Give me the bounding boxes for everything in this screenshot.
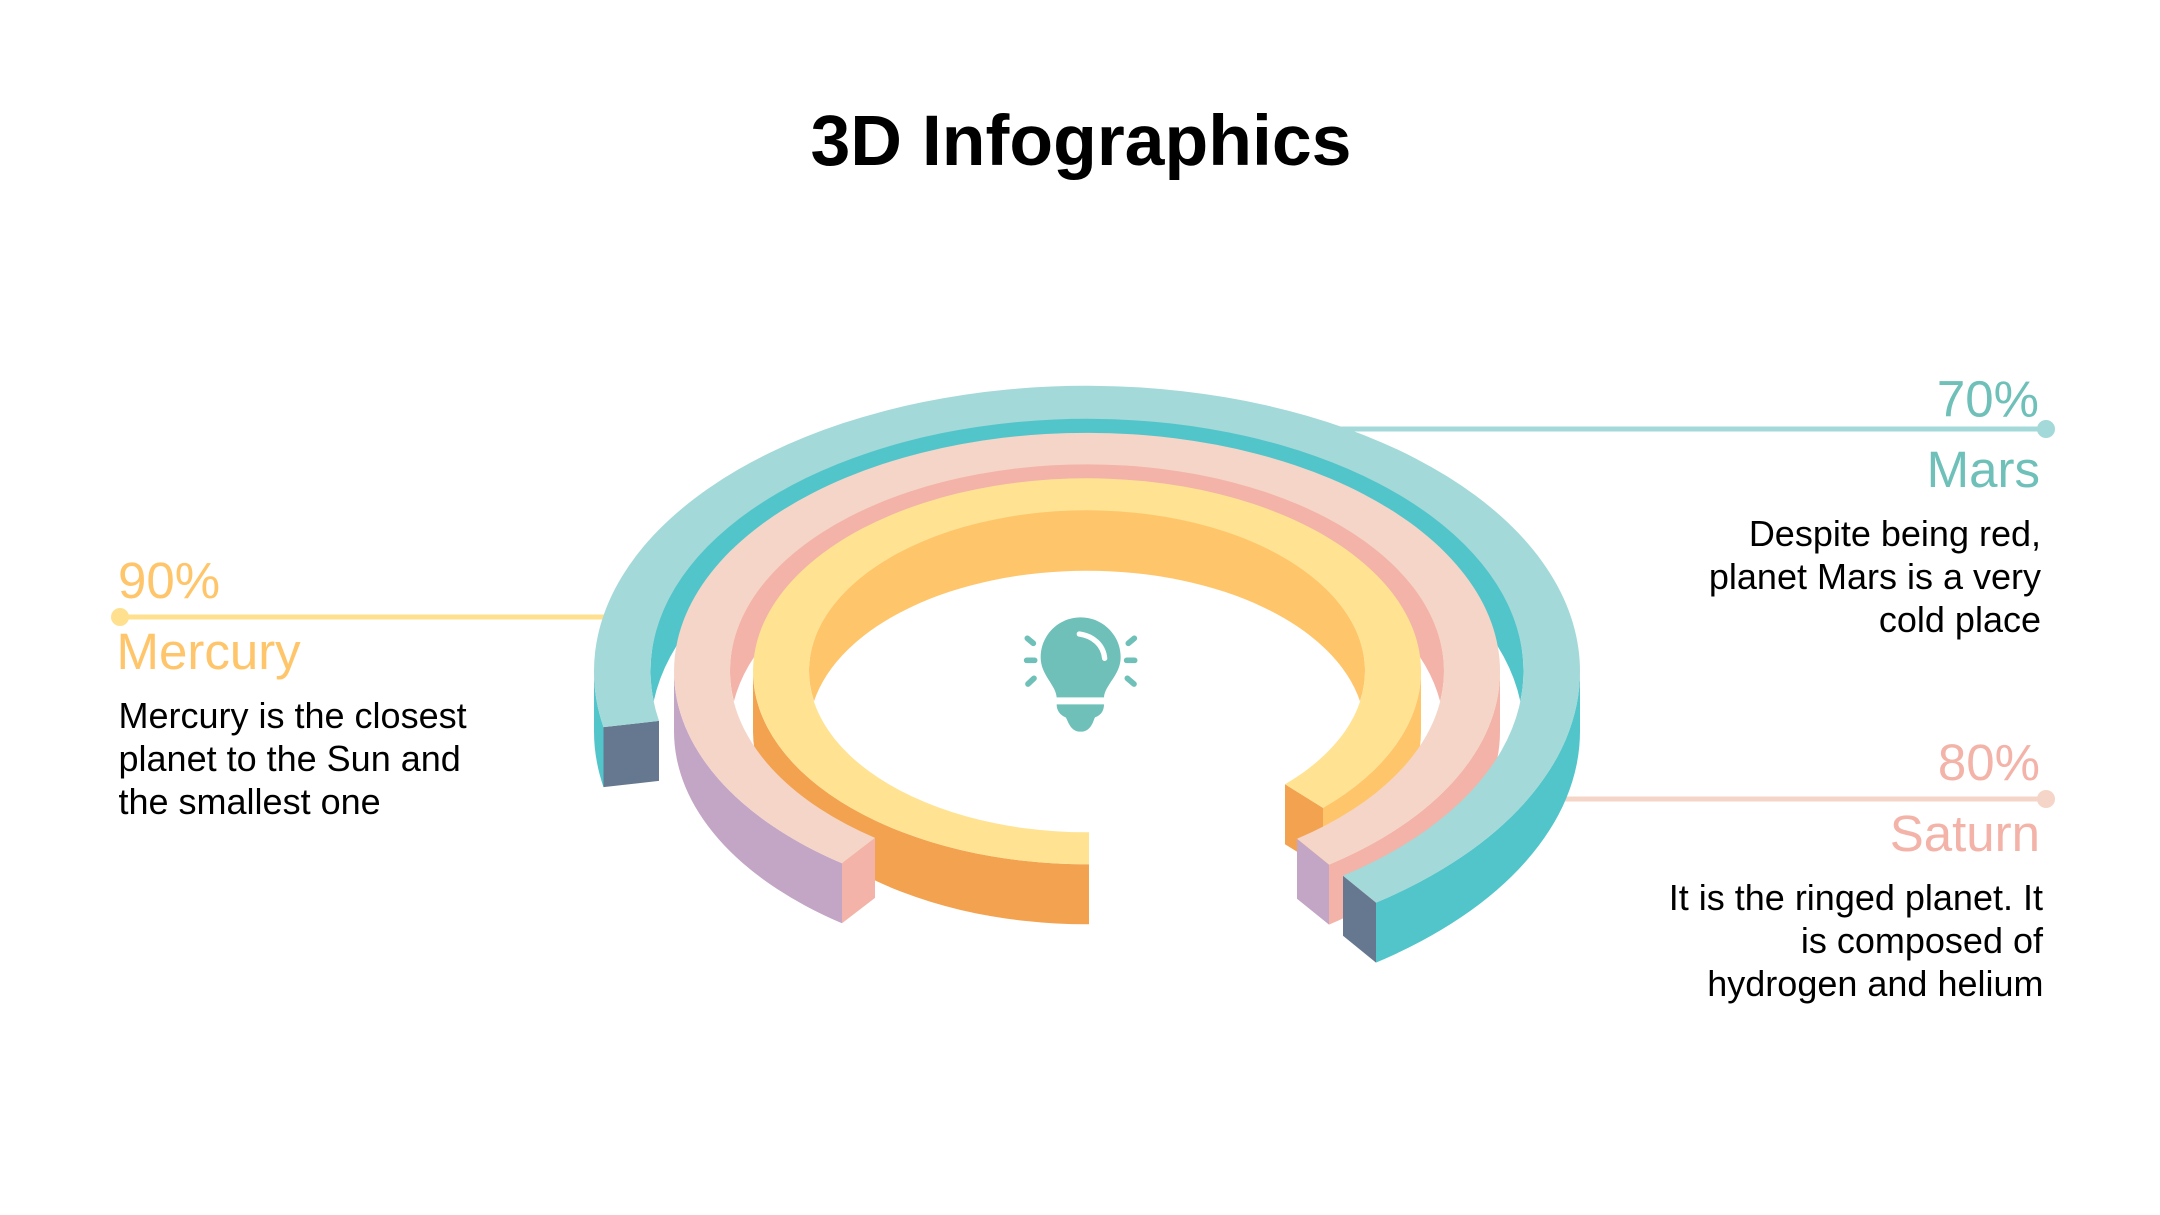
outer ring inner wall: [651, 418, 1524, 701]
text block: Mars: cold place: [1879, 599, 2041, 640]
middle ring, Saturn: [674, 433, 1500, 925]
connector: Mars: [1340, 420, 2055, 438]
text block: Saturn: is composed of: [1801, 920, 2044, 961]
text block: Mars: planet Mars is a very: [1709, 556, 2041, 597]
icon: light bulb: [1027, 617, 1135, 732]
text block: Mars: [1709, 370, 2041, 640]
title: 3D Infographics: [810, 101, 1352, 181]
inner ring inner wall: [809, 510, 1365, 701]
outer ring, Mars: [594, 386, 1580, 963]
connector: Saturn: [1540, 790, 2055, 808]
text block: Mars: Despite being red,: [1749, 513, 2041, 554]
3D ring chart: [594, 386, 1580, 963]
text block: Saturn: [1669, 734, 2044, 1004]
text block: Mars: 70%: [1937, 370, 2039, 428]
text block: Mercury: the smallest one: [118, 781, 381, 822]
middle ring inner wall: [730, 464, 1444, 701]
text block: Mercury: Mercury: [116, 623, 301, 680]
text block: Saturn: 80%: [1938, 734, 2040, 791]
text block: Saturn: hydrogen and helium: [1707, 963, 2044, 1004]
connector: Mercury: [111, 608, 640, 626]
inner ring, Mercury: [753, 478, 1421, 924]
text block: Saturn: It is the ringed planet. It: [1669, 877, 2043, 918]
text block: Mars: Mars: [1927, 441, 2040, 498]
text block: Mercury: 90%: [118, 552, 220, 609]
text block: Mercury: planet to the Sun and: [118, 738, 461, 779]
text block: Mercury: Mercury is the closest: [118, 695, 467, 736]
text block: Saturn: Saturn: [1890, 805, 2040, 862]
text block: Mercury: [116, 552, 467, 822]
